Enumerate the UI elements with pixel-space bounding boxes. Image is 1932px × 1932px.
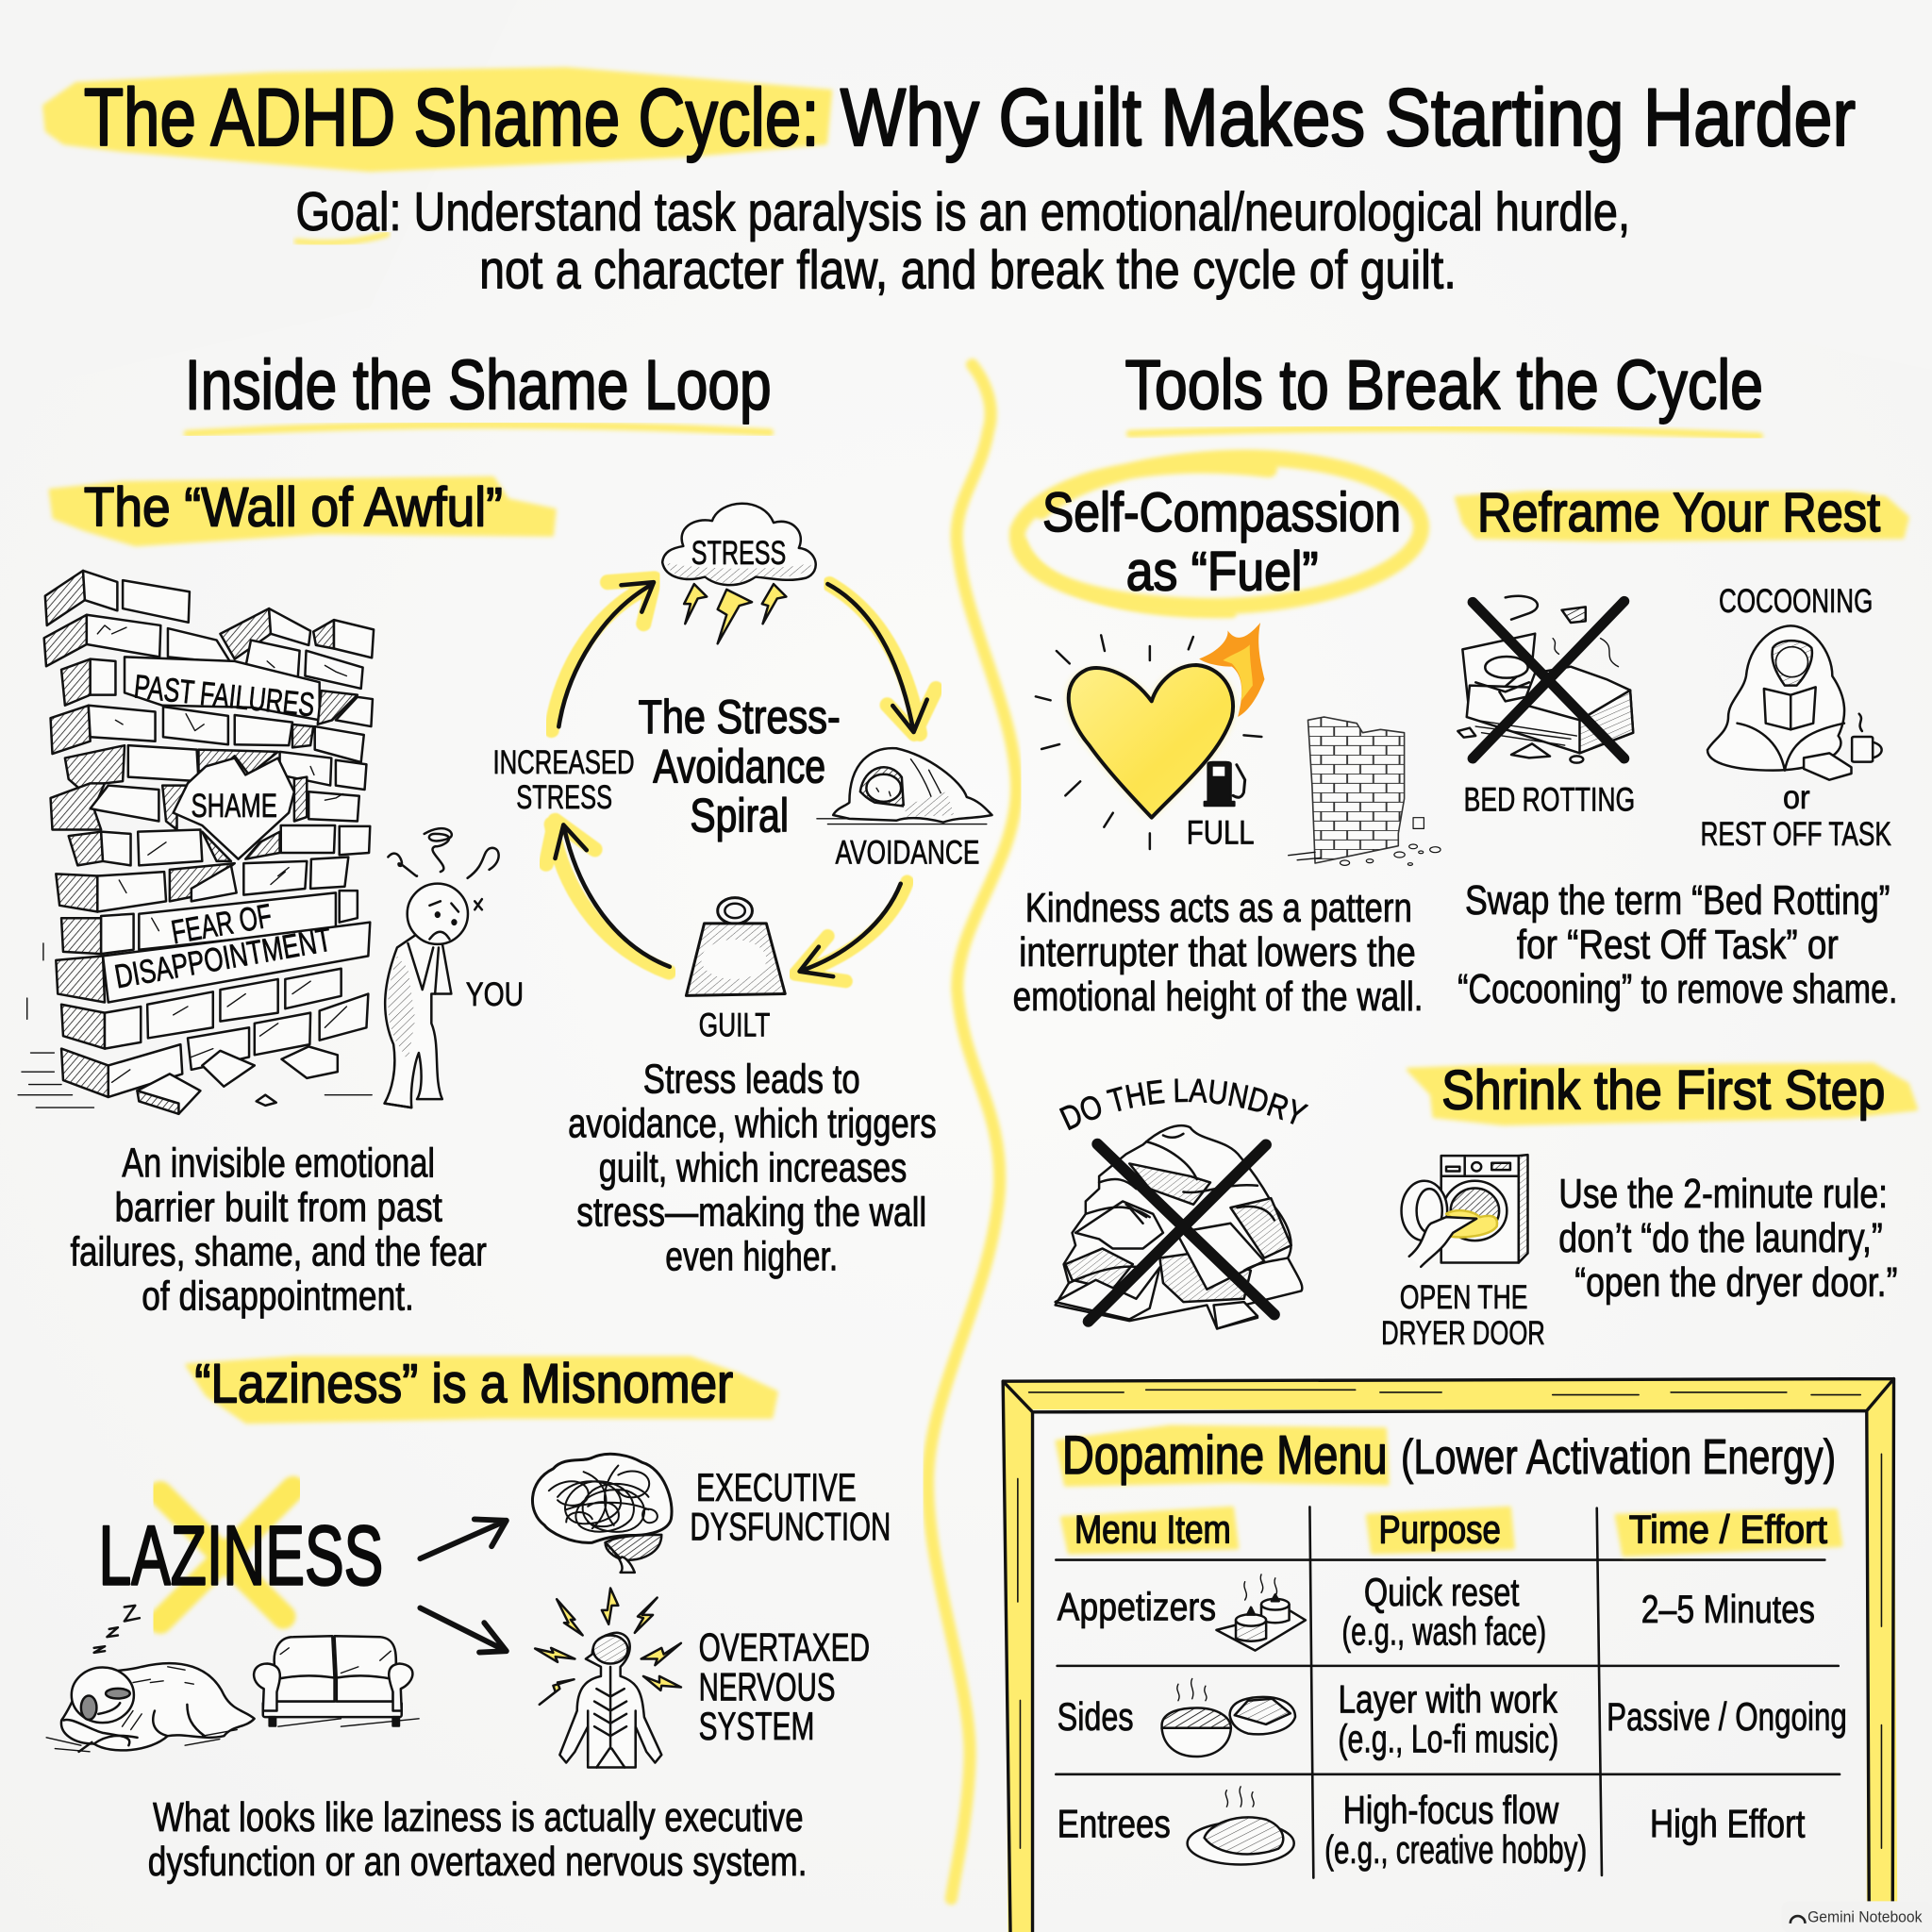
- label: cocooning: COCOONING: [1719, 583, 1873, 620]
- heading: self-compassion as fuel: [1017, 458, 1422, 614]
- heading: inside the shame loop: Inside the Shame Loop: [185, 346, 772, 425]
- text: wall of awful description: An invisible emotional: [122, 1141, 435, 1186]
- icon: sleeping sloth: [46, 1606, 255, 1752]
- label: stress: STRESS: [691, 535, 786, 572]
- watermark: [1782, 1901, 1932, 1932]
- heading: reframe your rest: Reframe Your Rest: [1477, 482, 1880, 543]
- icon: crossed out bed rotting: [1457, 596, 1633, 763]
- icon: couch: [254, 1636, 419, 1726]
- title: [44, 69, 1856, 170]
- heading: self-compassion as fuel: as “Fuel”: [1126, 541, 1319, 603]
- centre title: Spiral: [690, 790, 789, 842]
- label: open the dryer door: DRYER DOOR: [1381, 1315, 1545, 1352]
- wall label: past failures: PAST FAILURES: [132, 668, 316, 724]
- arrow: increased stress to stress: [552, 578, 655, 730]
- label: increased stress: STRESS: [516, 779, 612, 816]
- label: overtaxed nervous system: [699, 1625, 870, 1748]
- label: overtaxed nervous system: SYSTEM: [699, 1704, 814, 1748]
- icon: storm cloud: [662, 504, 816, 643]
- label: executive dysfunction: [690, 1465, 891, 1549]
- text: two minute rule: [1558, 1172, 1897, 1306]
- row: sides: Sides: [1058, 1694, 1134, 1739]
- text: spiral description: avoidance, which triggers: [568, 1102, 937, 1147]
- label: you: YOU: [466, 976, 524, 1013]
- text: spiral description: Stress leads to: [643, 1058, 860, 1103]
- text: spiral description: stress—making the wall: [576, 1191, 926, 1236]
- label: overtaxed nervous system: NERVOUS: [699, 1664, 836, 1708]
- label: bed rotting: BED ROTTING: [1464, 781, 1635, 818]
- menu heading: [1058, 1425, 1836, 1486]
- icon: heart with flame, rays and fuel pump: [1036, 623, 1264, 849]
- watermark: Gemini Notebook: [1807, 1909, 1923, 1926]
- wall label: fear of disappointment: FEAR OF: [169, 897, 275, 951]
- text: wall of awful description: barrier built from past: [114, 1185, 442, 1230]
- label: increased stress: INCREASED: [492, 744, 635, 781]
- menu frame: [1003, 1377, 1897, 1932]
- text: self compassion description: interrupter that lowers the: [1019, 930, 1416, 975]
- label: or rest off task: [1700, 779, 1891, 853]
- label: open the dryer door: OPEN THE: [1400, 1279, 1528, 1316]
- table header: menu item: Menu Item: [1074, 1507, 1231, 1551]
- text: spiral description: [568, 1058, 937, 1280]
- table header: purpose: Purpose: [1379, 1507, 1501, 1551]
- row: appetizers: Appetizers: [1058, 1585, 1216, 1629]
- icon: appetizers: [1216, 1574, 1306, 1651]
- divider between left and right columns: [928, 365, 1017, 1899]
- row: entrees: [1058, 1788, 1806, 1872]
- row: sides: Layer with work: [1338, 1677, 1557, 1722]
- heading: shrink the first step: Shrink the First Step: [1441, 1060, 1885, 1122]
- goal subtitle: not a character flaw, and break the cycle of guilt.: [479, 241, 1457, 301]
- row: sides: (e.g., Lo-fi music): [1338, 1716, 1558, 1760]
- label: avoidance: AVOIDANCE: [836, 835, 979, 872]
- text: reframe description: for “Rest Off Task” or: [1517, 923, 1839, 968]
- goal subtitle: [295, 182, 1630, 301]
- title: The ADHD Shame Cycle:: [84, 73, 820, 163]
- label: guilt: GUILT: [699, 1007, 770, 1043]
- heading: self-compassion as fuel: Self-Compassion: [1042, 482, 1401, 543]
- row: appetizers: (e.g., wash face): [1341, 1609, 1546, 1654]
- text: reframe description: [1457, 878, 1897, 1012]
- heading: laziness is a misnomer: “Laziness” is a Misnomer: [194, 1353, 733, 1414]
- icon: sides bowls: [1162, 1678, 1295, 1757]
- icon: washing machine with hand: [1402, 1155, 1527, 1267]
- icon: crossed out laundry pile: [1056, 1125, 1302, 1328]
- icon: entree plate: [1188, 1787, 1294, 1864]
- centre title: The Stress-: [639, 691, 841, 743]
- text: laziness description: dysfunction or an overtaxed nervous system.: [148, 1840, 808, 1885]
- row: entrees: High Effort: [1650, 1801, 1806, 1845]
- row: sides: Passive / Ongoing: [1607, 1694, 1847, 1739]
- row: appetizers: [1058, 1570, 1815, 1654]
- wall label: fear of disappointment: DISAPPOINTMENT: [112, 922, 334, 995]
- crossed out word: laziness: LAZINESS: [98, 1509, 383, 1603]
- crossed out word: laziness: [98, 1489, 383, 1622]
- icon: cocooning figure with book and mug: [1707, 625, 1882, 780]
- centre title: [639, 691, 841, 842]
- text: wall of awful description: failures, shame, and the fear: [70, 1229, 487, 1274]
- panel: dopamine menu: [1003, 1377, 1897, 1932]
- icon: guilt weight: [686, 898, 785, 995]
- icon: figure under blanket: [817, 748, 992, 824]
- arrow: stress to avoidance: [827, 584, 936, 734]
- arrows from laziness: [420, 1519, 507, 1653]
- table grid: [1056, 1507, 1840, 1878]
- text: laziness description: [148, 1795, 808, 1885]
- wall label: fear of disappointment: [112, 897, 334, 995]
- curved label: do the laundry: DO THE LAUNDRY: [1058, 1078, 1309, 1130]
- label: executive dysfunction: EXECUTIVE: [696, 1465, 857, 1509]
- table header: time effort: Time / Effort: [1629, 1507, 1827, 1551]
- text: self compassion description: emotional height of the wall.: [1013, 974, 1424, 1020]
- menu heading: Dopamine Menu: [1062, 1425, 1388, 1486]
- row: appetizers: 2–5 Minutes: [1641, 1587, 1815, 1631]
- wall label: shame: SHAME: [191, 788, 277, 824]
- icon: tangled brain: [532, 1454, 672, 1573]
- label: overtaxed nervous system: OVERTAXED: [699, 1625, 870, 1670]
- icon: crumbling small wall: [1289, 717, 1441, 865]
- icon: overtaxed nervous system figure: [535, 1589, 681, 1768]
- label: increased stress: [492, 744, 635, 816]
- label: or rest off task: or: [1783, 779, 1810, 816]
- row: entrees: (e.g., creative hobby): [1324, 1827, 1587, 1872]
- text: wall of awful description: of disappointment.: [142, 1274, 414, 1319]
- text: spiral description: even higher.: [665, 1235, 838, 1280]
- text: wall of awful description: [70, 1141, 487, 1319]
- illustration: wall of awful with person: [18, 571, 499, 1114]
- cycle diagram: stress-avoidance spiral: [492, 504, 992, 1043]
- row: entrees: High-focus flow: [1343, 1788, 1559, 1832]
- label: executive dysfunction: DYSFUNCTION: [690, 1505, 891, 1549]
- text: self compassion description: [1013, 886, 1424, 1020]
- label: open the dryer door: [1381, 1279, 1545, 1352]
- heading: tools to break the cycle: Tools to Break the Cycle: [1124, 346, 1763, 425]
- text: spiral description: guilt, which increases: [599, 1146, 907, 1191]
- row: appetizers: Quick reset: [1364, 1570, 1520, 1614]
- text: self compassion description: Kindness acts as a pattern: [1025, 886, 1412, 931]
- centre title: Avoidance: [653, 740, 825, 792]
- heading: wall of awful: The “Wall of Awful”: [84, 477, 503, 539]
- text: laziness description: What looks like laziness is actually executive: [153, 1795, 804, 1840]
- arrow: guilt to increased stress: [546, 821, 670, 973]
- goal subtitle: Goal: Understand task paralysis is an emotional/neurological hurdle,: [295, 182, 1630, 242]
- row: sides: [1058, 1677, 1847, 1760]
- row: entrees: Entrees: [1058, 1801, 1171, 1845]
- label: full: FULL: [1187, 815, 1255, 852]
- arrow: avoidance to guilt: [795, 882, 908, 981]
